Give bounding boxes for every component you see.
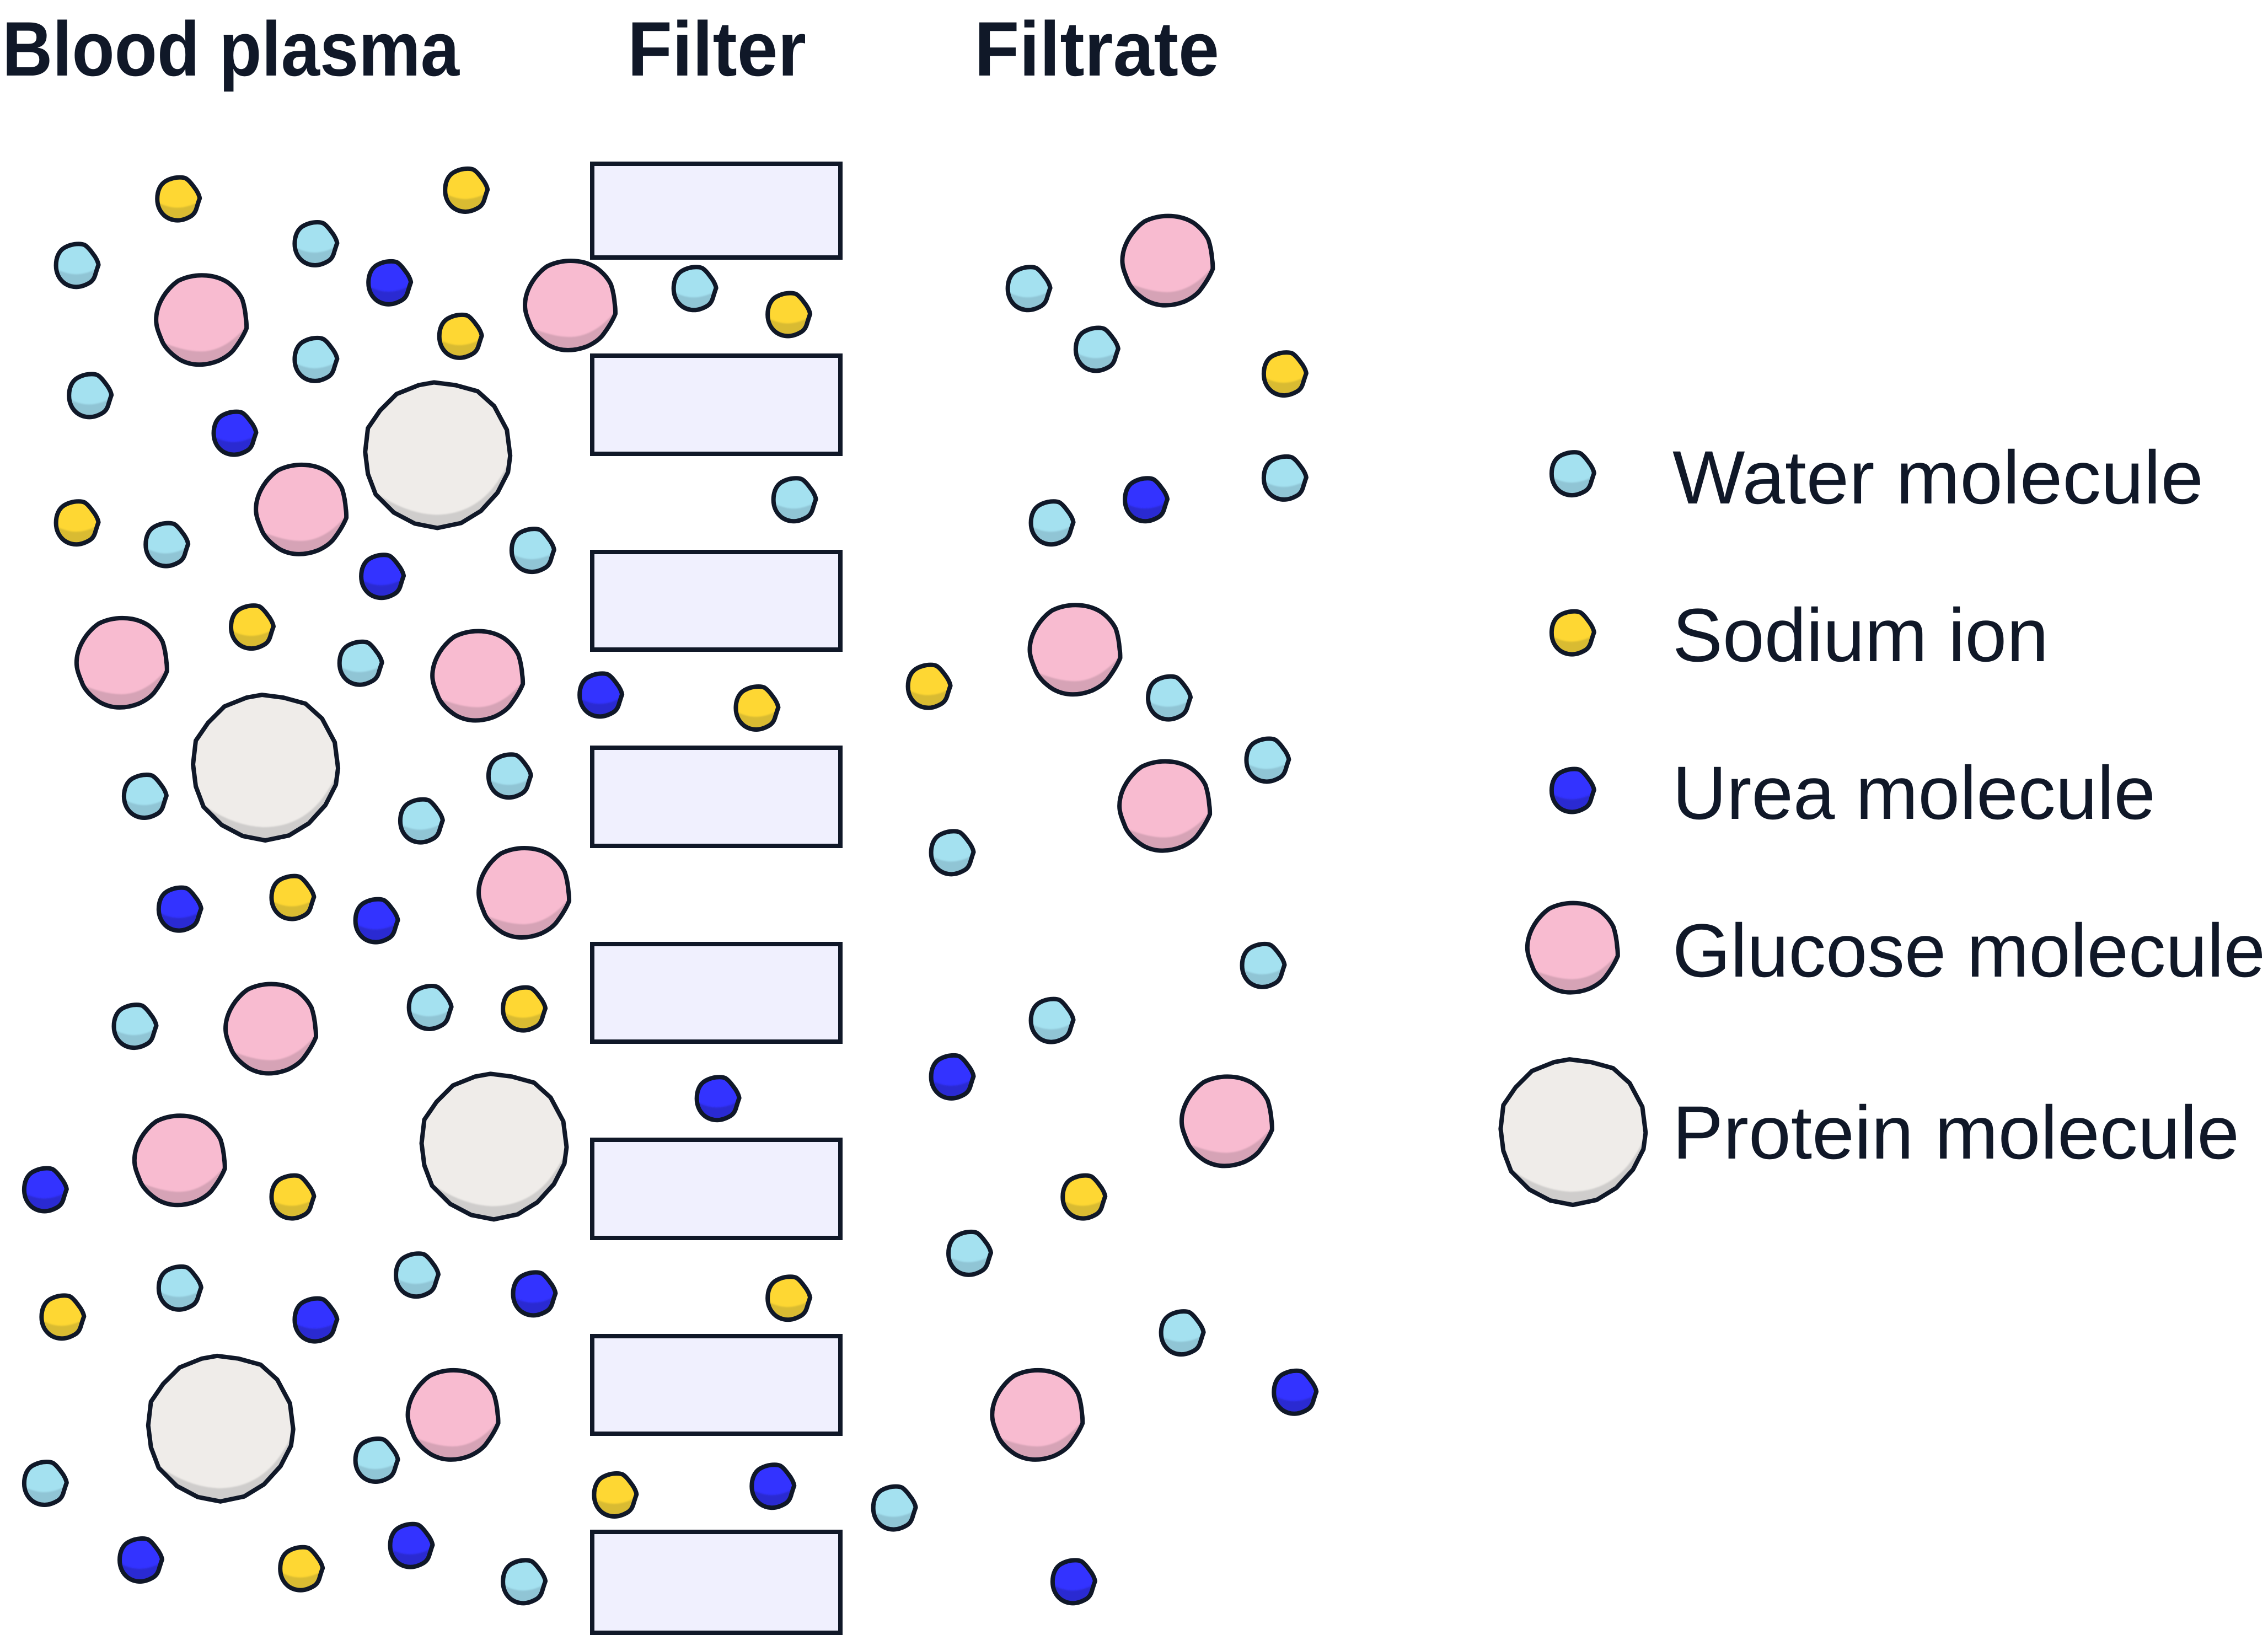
water molecule [328,636,394,696]
sodium ion [260,870,326,931]
water molecule [1064,321,1130,382]
glucose molecule [61,608,183,723]
sodium ion [756,1271,822,1331]
glucose molecule [463,838,585,953]
filter block 1 [592,164,840,258]
legend label: urea molecule: Urea molecule [1672,751,2156,835]
water molecule [389,794,455,854]
water molecule [1020,993,1086,1054]
protein molecule [406,1064,582,1235]
glucose molecule [1107,206,1228,321]
urea molecule [1113,472,1179,533]
water molecule [920,825,986,886]
water molecule [862,1481,928,1541]
legend icon: water molecule [1540,446,1606,507]
urea molecule [501,1266,567,1327]
urea molecule [283,1293,349,1353]
water molecule [500,523,566,583]
filter block 2 [592,356,840,454]
urea molecule [1262,1365,1328,1425]
sodium ion [219,599,286,660]
water molecule [1150,1305,1216,1366]
sodium ion [45,495,111,556]
urea molecule [568,667,634,728]
glucose molecule [510,250,631,366]
glucose molecule [1104,751,1225,867]
urea molecule [147,882,213,942]
urea molecule [13,1162,79,1223]
legend [1484,436,2265,1220]
water molecule [1020,495,1086,556]
glucose molecule [393,1360,514,1476]
urea molecule [740,1459,806,1519]
legend icon: glucose molecule [1512,893,1633,1009]
heading: Filtrate: Filtrate [974,6,1219,92]
sodium ion [724,680,790,741]
sodium ion [260,1170,326,1230]
glucose molecule [417,621,538,737]
glucose molecule [977,1360,1098,1476]
water molecule [1252,451,1318,511]
panel: filtrate molecules [862,206,1328,1615]
urea molecule [379,1518,445,1579]
urea molecule [350,549,416,609]
water molecule [1231,938,1297,999]
heading: Blood plasma: Blood plasma [2,6,460,92]
urea molecule [357,255,423,316]
urea molecule [920,1049,986,1110]
sodium ion [491,982,557,1042]
water molecule [13,1456,79,1516]
water molecule [147,1261,213,1321]
legend label: protein molecule: Protein molecule [1672,1091,2239,1175]
filter block 8 [592,1532,840,1633]
water molecule [344,1433,410,1493]
glucose molecule [141,265,262,380]
water molecule [996,261,1063,321]
filter block 7 [592,1336,840,1434]
urea molecule [685,1071,752,1132]
urea molecule [344,893,410,954]
water molecule [57,368,124,428]
water molecule [384,1247,451,1308]
heading: Filter: Filter [628,6,806,92]
urea molecule [202,406,269,467]
filter block 6 [592,1140,840,1238]
water molecule [103,999,169,1059]
legend icon: protein molecule [1484,1049,1661,1220]
protein molecule [177,685,353,856]
glucose molecule [1014,594,1135,710]
urea molecule [1041,1554,1107,1615]
sodium ion [582,1467,648,1528]
water molecule [45,238,111,298]
water molecule [1235,732,1301,793]
sodium ion [897,659,963,720]
water molecule [283,332,349,393]
water molecule [134,517,200,578]
sodium ion [1252,346,1318,407]
protein molecule [132,1346,309,1517]
water molecule [477,748,543,809]
glucose molecule [240,454,362,570]
protein molecule [349,372,526,543]
panel: blood plasma molecules [13,163,631,1615]
glucose molecule [210,974,331,1090]
filter block 3 [592,552,840,650]
urea molecule [108,1532,174,1593]
sodium ion [1051,1170,1117,1230]
water molecule [112,769,179,829]
water molecule [283,216,349,277]
filter block 4 [592,748,840,846]
legend icon: urea molecule [1540,763,1606,824]
molecules passing through filter gaps [568,261,828,1528]
water molecule [662,261,728,321]
sodium ion [146,171,212,232]
water molecule [491,1554,557,1615]
sodium ion [269,1541,335,1602]
glucose molecule [1166,1066,1288,1182]
sodium ion [30,1289,96,1350]
glucose molecule [119,1105,240,1221]
sodium ion [433,163,500,223]
legend label: sodium ion: Sodium ion [1672,593,2049,678]
sodium ion [428,309,494,369]
water molecule [1136,671,1203,731]
legend label: glucose molecule: Glucose molecule [1672,909,2265,993]
water molecule [762,472,828,533]
filter block 5 [592,944,840,1042]
legend icon: sodium ion [1540,605,1606,666]
sodium ion [756,287,822,348]
water molecule [398,980,464,1041]
panel: filter membrane blocks [592,164,840,1633]
water molecule [937,1226,1003,1286]
legend label: water molecule: Water molecule [1672,436,2203,520]
